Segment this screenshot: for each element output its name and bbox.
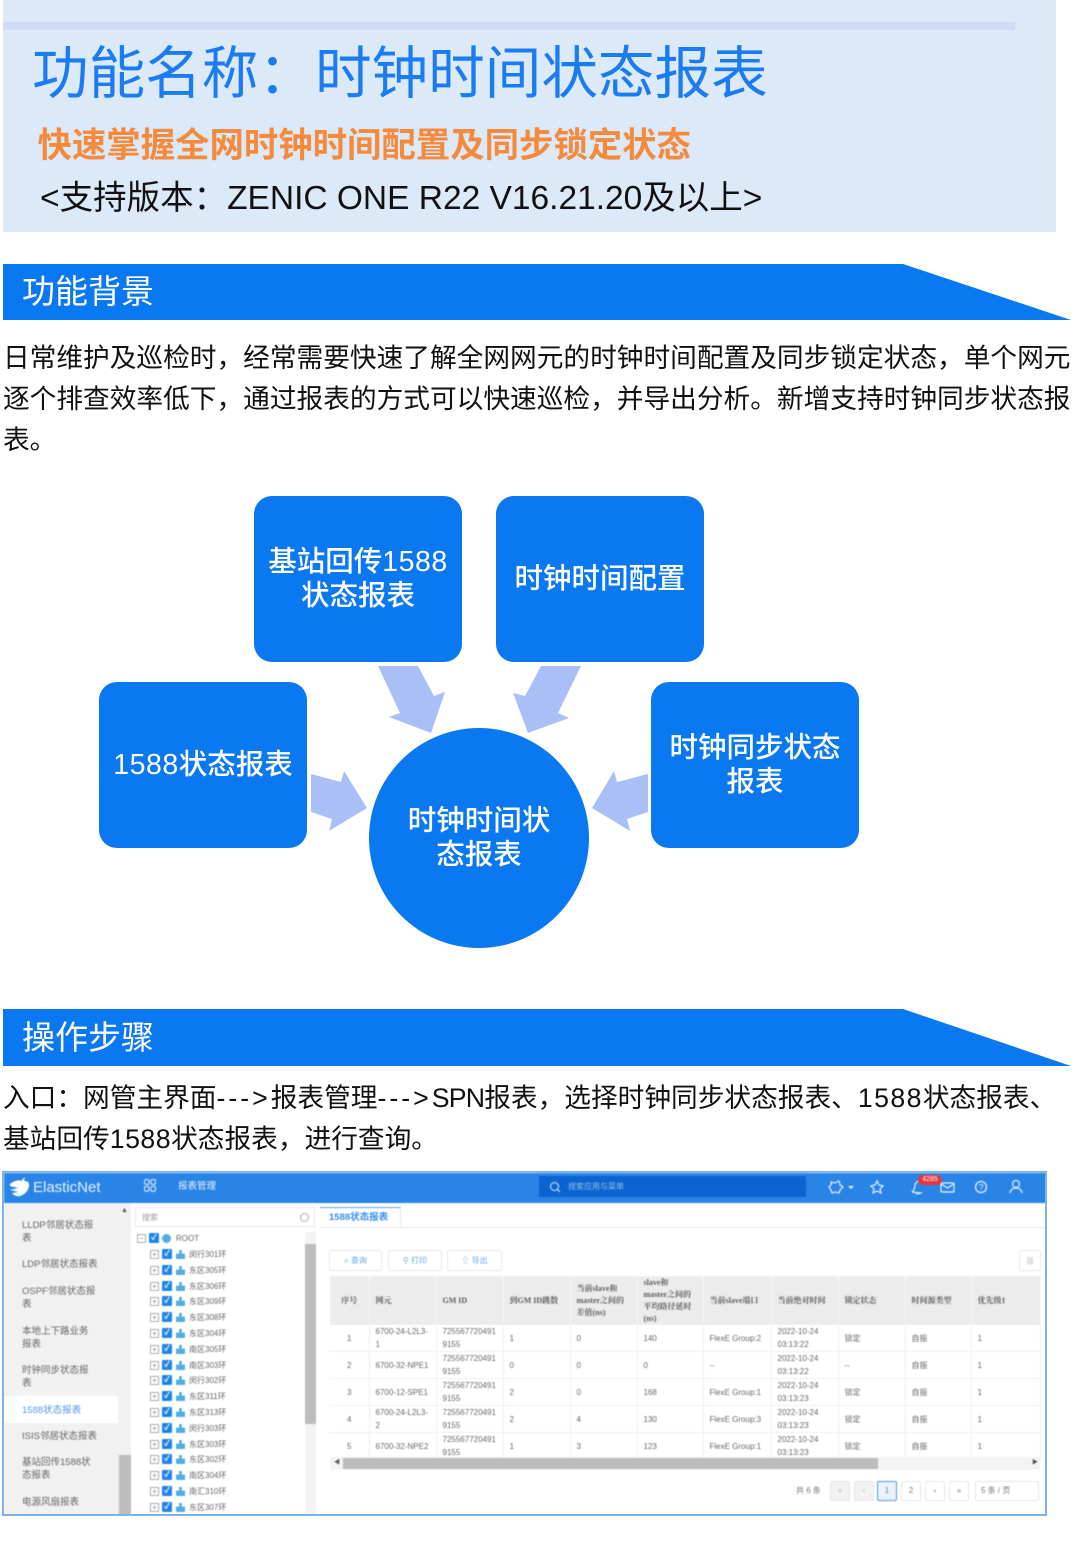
data table: 2022-10-24: [778, 1381, 818, 1390]
data table: 1: [347, 1334, 351, 1342]
heading banner: 功能背景: 功能背景: [22, 273, 154, 310]
brand name: ElasticNet: [33, 1179, 101, 1196]
data table: 当前slave端口: [710, 1296, 758, 1304]
data table: 0: [510, 1360, 514, 1370]
data table: 平均路径延时: [644, 1302, 692, 1310]
panel: application screenshot: ✓: [164, 1454, 170, 1463]
data table: 3: [347, 1388, 351, 1396]
panel: application screenshot: 时钟同步状态报: [22, 1365, 89, 1376]
page size select: [975, 1481, 1039, 1501]
tree search box: [135, 1207, 315, 1227]
data table: 725567720491: [442, 1435, 496, 1444]
toolbar icons: [828, 1179, 1024, 1196]
panel: application screenshot: ›: [934, 1486, 936, 1495]
tree scrollbar: [305, 1232, 316, 1516]
data table: 6700-24-L2L3-: [376, 1408, 428, 1417]
panel: application screenshot: 南区305环: [189, 1345, 226, 1354]
data table: 140: [644, 1334, 657, 1342]
panel: application screenshot: +: [152, 1345, 157, 1354]
button: columns: |||: [1027, 1256, 1033, 1265]
data table: --: [710, 1360, 715, 1370]
panel: application screenshot: ‹: [863, 1486, 865, 1495]
panel: application screenshot: 表: [22, 1378, 32, 1389]
button: print: ⚲ 打印: [403, 1256, 427, 1265]
data table: slave和: [644, 1278, 668, 1286]
text block: background description: [3, 343, 1070, 455]
panel: application screenshot: 东区305环: [189, 1266, 226, 1275]
panel: application screenshot: 东区304环: [189, 1329, 226, 1338]
data table: 9155: [442, 1421, 460, 1430]
panel: application screenshot: 南汇310环: [189, 1487, 226, 1496]
data table: master之间的: [576, 1296, 624, 1304]
text block: entry path: [3, 1083, 1056, 1154]
data table: 1: [978, 1414, 982, 1424]
data table: 03:13:23: [778, 1448, 809, 1457]
panel: application screenshot: [2, 1171, 1047, 1516]
panel: application screenshot: ✓: [164, 1360, 170, 1369]
data table: 0: [576, 1388, 581, 1396]
sidebar menu: [4, 1203, 131, 1516]
tree root: [136, 1232, 200, 1244]
panel: application screenshot: +: [152, 1329, 157, 1338]
panel: application screenshot: 态报表: [22, 1470, 51, 1481]
data table: 6700-32-NPE2: [376, 1442, 428, 1450]
arrow: top-left: [378, 666, 445, 733]
data table: 自振: [912, 1388, 928, 1396]
panel: application screenshot: 东区308环: [189, 1313, 226, 1322]
button: query: [329, 1250, 382, 1271]
data table: 网元: [376, 1296, 392, 1304]
tree nodes: 闵行301环: [189, 1250, 226, 1259]
data table: 优先级1: [978, 1296, 1006, 1304]
text block: entry path: 基站回传1588状态报表，进行查询。: [3, 1124, 438, 1154]
panel: application screenshot: «: [838, 1486, 842, 1495]
box: clock sync status report: [651, 682, 859, 848]
panel: application screenshot: 东区311环: [189, 1392, 226, 1401]
panel: application screenshot: 电源风扇报表: [22, 1497, 79, 1508]
panel: application screenshot: +: [152, 1297, 157, 1306]
panel: application screenshot: »: [957, 1486, 961, 1495]
data table: 2022-10-24: [778, 1435, 818, 1444]
data table: 03:13:22: [778, 1367, 809, 1376]
panel: application screenshot: 闵行302环: [189, 1376, 226, 1385]
panel: application screenshot: 东区309环: [189, 1297, 226, 1306]
data table: 725567720491: [442, 1408, 496, 1417]
panel: application screenshot: 2: [909, 1486, 913, 1495]
panel: application screenshot: ✓: [164, 1281, 170, 1290]
data table: master之间的: [644, 1290, 691, 1298]
panel: application screenshot: +: [152, 1392, 157, 1401]
box: clock sync status report: 时钟同步状态: [669, 732, 840, 764]
panel: application screenshot: ✓: [164, 1502, 170, 1511]
panel: application screenshot: +: [152, 1282, 157, 1291]
data table: 725567720491: [442, 1327, 496, 1336]
data table: 0: [644, 1360, 648, 1370]
data table: 4: [347, 1414, 351, 1424]
box: 1588 status report: [99, 682, 307, 848]
data table: 锁定: [844, 1334, 860, 1342]
panel: application screenshot: 表: [22, 1299, 32, 1310]
data table: 2022-10-24: [778, 1408, 818, 1417]
box: clock sync status report: 报表: [726, 766, 784, 798]
box: 1588 status report: 1588状态报表: [113, 749, 293, 781]
panel: application screenshot: 南区304环: [189, 1471, 226, 1480]
data table: 1: [978, 1360, 982, 1370]
tab bar line: [320, 1227, 1046, 1228]
panel: application screenshot: +: [152, 1440, 157, 1449]
panel: application screenshot: 东区306环: [189, 1282, 226, 1291]
data table: 2022-10-24: [778, 1354, 818, 1363]
tree root: ROOT: [176, 1234, 199, 1243]
title: 功能名称：时钟时间状态报表: [32, 42, 768, 105]
panel: application screenshot: 东区313环: [189, 1408, 226, 1417]
arrow: right: [592, 771, 648, 831]
button: print: [388, 1250, 442, 1271]
table horizontal scrollbar: ▶: [1032, 1460, 1038, 1466]
panel: application screenshot: ✓: [164, 1312, 170, 1321]
data table: 自振: [912, 1334, 928, 1342]
active tab: [320, 1207, 401, 1227]
box: base station backhaul 1588 report: 基站回传1588: [268, 546, 448, 578]
data table: GM ID: [442, 1296, 467, 1304]
data table: 锁定: [844, 1414, 860, 1424]
data table: FlexE Group:1: [710, 1442, 761, 1450]
panel: application screenshot: +: [152, 1455, 157, 1464]
data table: 03:13:22: [778, 1340, 809, 1349]
apps icon: [143, 1178, 157, 1192]
tree search box: 搜索: [142, 1213, 158, 1222]
data table: 3: [576, 1442, 581, 1450]
panel: application screenshot: ✓: [164, 1375, 170, 1384]
data table: FlexE Group:2: [710, 1334, 761, 1342]
arrow: top-right: [513, 666, 581, 733]
subtitle: 快速掌握全网时钟时间配置及同步锁定状态: [38, 127, 691, 165]
panel: application screenshot: 1588状态报表: [22, 1405, 81, 1416]
sidebar items: 表: [22, 1233, 32, 1244]
data table: 2022-10-24: [778, 1327, 818, 1336]
data table: 1: [978, 1334, 982, 1342]
panel: application screenshot: ✓: [164, 1296, 170, 1305]
button: query: ⌕ 查询: [344, 1256, 367, 1265]
data table: FlexE Group:1: [710, 1388, 761, 1396]
panel: application screenshot: LDP邻居状态报表: [22, 1259, 97, 1270]
diagram: report types converge: [99, 496, 859, 948]
text block: entry path: 入口：网管主界面--->报表管理--->SPN报表，选择时钟同步状态报表、1588状态报表、: [3, 1083, 1056, 1113]
button: export: ⇧ 导出: [461, 1256, 488, 1265]
text block: background description: 日常维护及巡检时，经常需要快速了解全网网元的时钟时间配置及同步锁定状态，单个网元: [3, 343, 1070, 373]
panel: application screenshot: 1: [885, 1486, 889, 1495]
data table: [330, 1276, 1041, 1460]
panel: application screenshot: ✓: [164, 1328, 170, 1337]
data table: 锁定: [844, 1442, 860, 1450]
data table: 1: [510, 1334, 514, 1342]
toolbar icons: ?: [979, 1183, 984, 1192]
circle: clock time status report: [369, 728, 589, 948]
panel: application screenshot: ✓: [164, 1439, 170, 1448]
panel: application screenshot: 东区307环: [189, 1503, 226, 1512]
data table: 锁定状态: [844, 1296, 876, 1304]
data table: 0: [576, 1334, 581, 1342]
button: export: [447, 1250, 502, 1271]
data table: 1: [978, 1388, 982, 1396]
data table: 725567720491: [442, 1381, 496, 1390]
table horizontal scrollbar: [330, 1457, 1040, 1470]
panel: application screenshot: 基站回传1588状: [22, 1457, 91, 1468]
box: clock time configuration: 时钟时间配置: [514, 563, 686, 595]
panel: application screenshot: 东区302环: [189, 1455, 226, 1464]
data table: 2: [510, 1388, 514, 1396]
tree root: ✓: [151, 1233, 157, 1242]
circle: clock time status report: 态报表: [436, 838, 522, 870]
data table: 168: [644, 1388, 657, 1396]
panel: application screenshot: +: [152, 1361, 157, 1370]
panel: application screenshot: ✓: [164, 1407, 170, 1416]
text block: background description: 表。: [3, 425, 56, 455]
panel: application screenshot: ✓: [164, 1423, 170, 1432]
logo: [9, 1176, 30, 1197]
panel: application screenshot: ✓: [164, 1344, 170, 1353]
panel: application screenshot: OSPF邻居状态报: [22, 1286, 95, 1297]
text block: background description: 逐个排查效率低下，通过报表的方式可以快速巡检，并导出分析。新增支持时钟同步状态报: [3, 384, 1070, 414]
panel: application screenshot: +: [152, 1376, 157, 1385]
data table: 6700-24-L2L3-: [376, 1327, 428, 1336]
data table: 9155: [442, 1340, 460, 1349]
data table: 9155: [442, 1367, 460, 1376]
panel: application screenshot: +: [152, 1503, 157, 1512]
data table: 到GM ID跳数: [510, 1296, 558, 1304]
data table: 差值(ns): [576, 1308, 605, 1316]
data table: 130: [644, 1414, 657, 1424]
panel: application screenshot: +: [152, 1408, 157, 1417]
data table: 自振: [912, 1360, 928, 1370]
data table: 1: [510, 1442, 514, 1450]
data table: 序号: [341, 1296, 357, 1304]
data table: 2: [347, 1360, 351, 1370]
data table: 6700-32-NPE1: [376, 1360, 428, 1370]
data table: 03:13:23: [778, 1421, 809, 1430]
data table: 2: [510, 1414, 514, 1424]
panel: application screenshot: +: [152, 1487, 157, 1496]
data table: 自振: [912, 1442, 928, 1450]
panel: application screenshot: ✓: [164, 1391, 170, 1400]
panel: application screenshot: ✓: [164, 1470, 170, 1479]
decorative title band: [3, 22, 1015, 30]
data table: 123: [644, 1442, 657, 1450]
data table: --: [844, 1360, 850, 1370]
sidebar items: [22, 1219, 94, 1244]
supported version: <支持版本：ZENIC ONE R22 V16.21.20及以上>: [40, 180, 762, 217]
notification badge: 4285: [922, 1176, 938, 1183]
panel: application screenshot: +: [152, 1266, 157, 1275]
box: base station backhaul 1588 report: 状态报表: [301, 580, 415, 612]
top navigation bar: [4, 1173, 1046, 1203]
data table: 当前绝对时间: [778, 1296, 826, 1304]
tree nodes: +: [152, 1250, 157, 1259]
data table: 0: [576, 1360, 581, 1370]
menu name: 报表管理: [178, 1181, 216, 1192]
data table: 自振: [912, 1414, 928, 1424]
data table: 4: [576, 1414, 581, 1424]
arrows pointing to circle: [311, 666, 648, 831]
panel: application screenshot: ✓: [164, 1486, 170, 1495]
search box: 搜索应用与菜单: [568, 1182, 624, 1191]
panel: application screenshot: 南区303环: [189, 1361, 226, 1370]
box: clock time configuration: [496, 496, 704, 662]
data table: 725567720491: [442, 1354, 496, 1363]
panel: application screenshot: +: [152, 1471, 157, 1480]
sidebar active item: [4, 1396, 118, 1423]
sidebar scroll arrow: ▲: [121, 1207, 128, 1214]
panel: application screenshot: 本地上下路业务: [22, 1326, 89, 1337]
data table: 1: [978, 1442, 982, 1450]
heading banner: 操作步骤: [3, 1009, 1071, 1066]
data table: FlexE Group:3: [710, 1414, 761, 1424]
search box: [539, 1176, 806, 1197]
heading banner: 功能背景: [3, 264, 1071, 320]
panel: application screenshot: 闵行303环: [189, 1424, 226, 1433]
panel: application screenshot: ✓: [164, 1265, 170, 1274]
heading banner: 操作步骤: 操作步骤: [22, 1019, 154, 1056]
panel: application screenshot: 报表: [22, 1339, 41, 1350]
arrow: left: [311, 771, 367, 831]
table horizontal scrollbar: ◀: [334, 1460, 340, 1466]
data table: 锁定: [844, 1388, 860, 1396]
panel: application screenshot: 东区303环: [189, 1440, 226, 1449]
data table: 6700-12-SPE1: [376, 1388, 428, 1396]
tree root: −: [139, 1234, 144, 1243]
data table: 5: [347, 1442, 351, 1450]
data table: (ns): [644, 1314, 656, 1322]
panel: application screenshot: +: [152, 1313, 157, 1322]
data table: 时间源类型: [912, 1296, 952, 1304]
data table: 03:13:23: [778, 1394, 809, 1403]
sidebar items: LLDP邻居状态报: [22, 1220, 93, 1231]
tree nodes: ✓: [164, 1249, 170, 1258]
page size select: 5 条 / 页: [981, 1486, 1010, 1495]
pagination: 共 6 条: [796, 1486, 821, 1495]
box: base station backhaul 1588 report: [254, 496, 462, 662]
data table: 2: [376, 1421, 380, 1430]
active tab: 1588状态报表: [329, 1212, 388, 1223]
panel: application screenshot: ISIS邻居状态报表: [22, 1431, 97, 1442]
circle: clock time status report: 时钟时间状: [408, 804, 550, 836]
button: columns: [1019, 1250, 1041, 1271]
panel: title header: [3, 0, 1056, 232]
panel: application screenshot: +: [152, 1424, 157, 1433]
data table: 9155: [442, 1394, 460, 1403]
data table: 9155: [442, 1448, 460, 1457]
data table: 1: [376, 1340, 380, 1349]
data table: 当前slave和: [576, 1284, 617, 1292]
tree nodes: [150, 1248, 226, 1260]
notification badge: [918, 1175, 942, 1185]
sidebar scrollbar: [119, 1455, 131, 1516]
